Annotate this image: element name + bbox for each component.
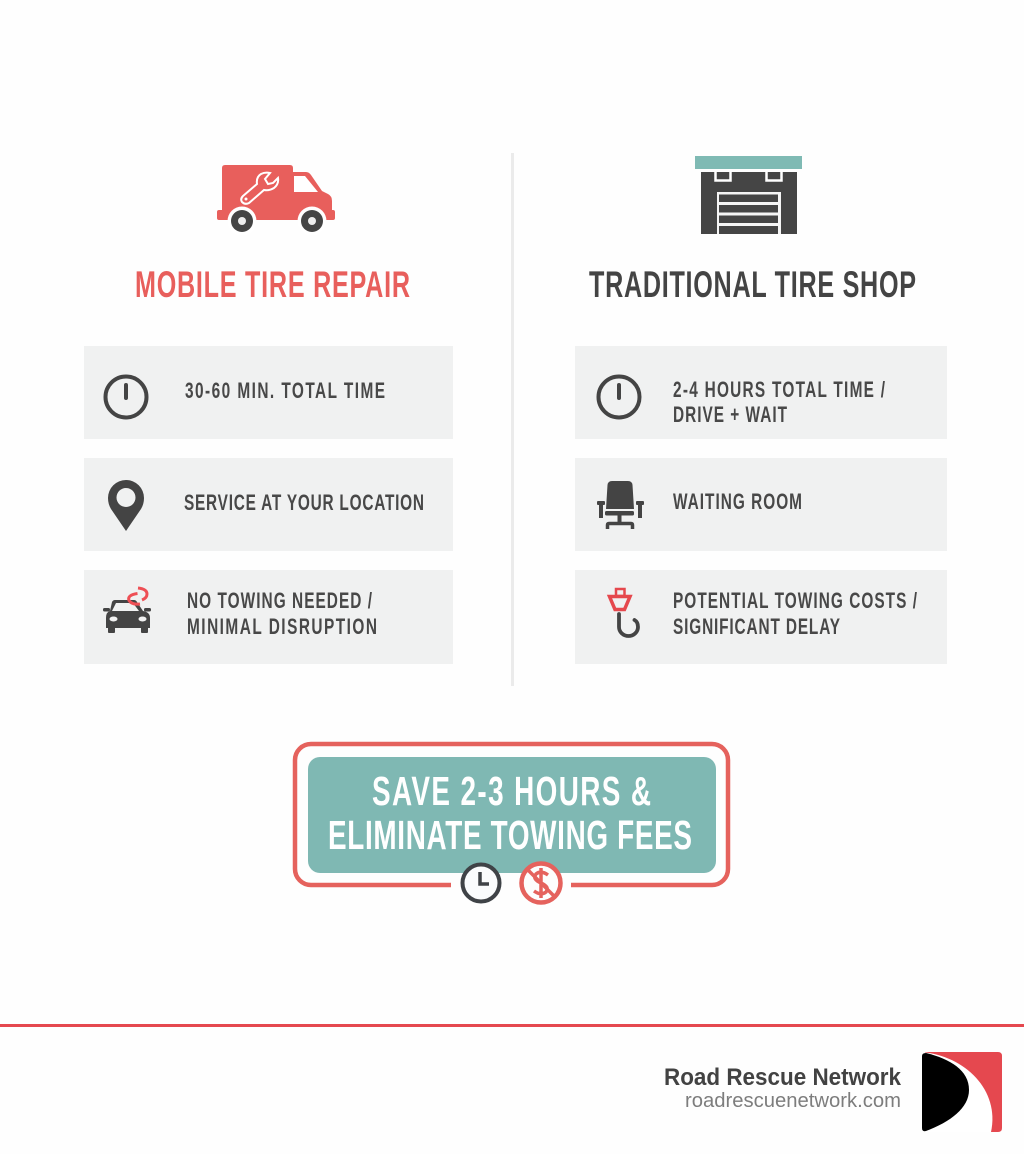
row: location	[84, 458, 453, 551]
icon: no fees	[522, 864, 560, 902]
text: total time: 30-60 MIN. TOTAL TIME	[185, 379, 385, 404]
text: no towing: NO TOWING NEEDED /	[187, 589, 373, 614]
icon: location pin	[108, 480, 144, 531]
icon: car with red arrows	[103, 588, 151, 633]
callout text: ELIMINATE TOWING FEES	[328, 813, 692, 858]
row: towing costs	[575, 570, 947, 664]
row: waiting room	[575, 458, 947, 551]
footer website: roadrescuenetwork.com	[685, 1090, 901, 1112]
text: total time drive and wait	[673, 378, 886, 428]
icon: clock	[598, 376, 640, 418]
heading: mobile tire repair: MOBILE TIRE REPAIR	[135, 263, 410, 305]
callout text	[328, 769, 692, 858]
heading: traditional tire shop: TRADITIONAL TIRE SHOP	[589, 263, 916, 305]
footer rule	[0, 1024, 1024, 1027]
text: location: SERVICE AT YOUR LOCATION	[184, 491, 424, 516]
icon: clock	[106, 376, 146, 418]
text: no towing	[187, 589, 377, 640]
icon: repair van	[217, 165, 335, 236]
text: waiting room: WAITING ROOM	[673, 490, 802, 515]
icon: garage	[695, 156, 802, 234]
panel: traditional tire shop	[575, 156, 947, 664]
footer brand name: Road Rescue Network	[664, 1064, 902, 1091]
icon: office chair	[597, 481, 644, 529]
row: total time drive and wait	[575, 346, 947, 439]
text: total time drive and wait: DRIVE + WAIT	[673, 403, 787, 428]
text: towing costs: POTENTIAL TOWING COSTS /	[673, 589, 918, 614]
row: no towing	[84, 570, 453, 664]
panel: mobile tire repair	[84, 165, 453, 664]
logo	[922, 1052, 1002, 1132]
text: towing costs: SIGNIFICANT DELAY	[673, 615, 840, 640]
row: total time	[84, 346, 453, 439]
text: total time drive and wait: 2-4 HOURS TOTAL TIME /	[673, 378, 886, 403]
text: no towing: MINIMAL DISRUPTION	[187, 615, 377, 640]
callout text: SAVE 2-3 HOURS &	[372, 769, 651, 814]
icon: clock	[462, 864, 500, 902]
text: towing costs	[673, 589, 918, 640]
callout: savings	[295, 744, 728, 902]
icon: tow hook	[610, 589, 638, 636]
